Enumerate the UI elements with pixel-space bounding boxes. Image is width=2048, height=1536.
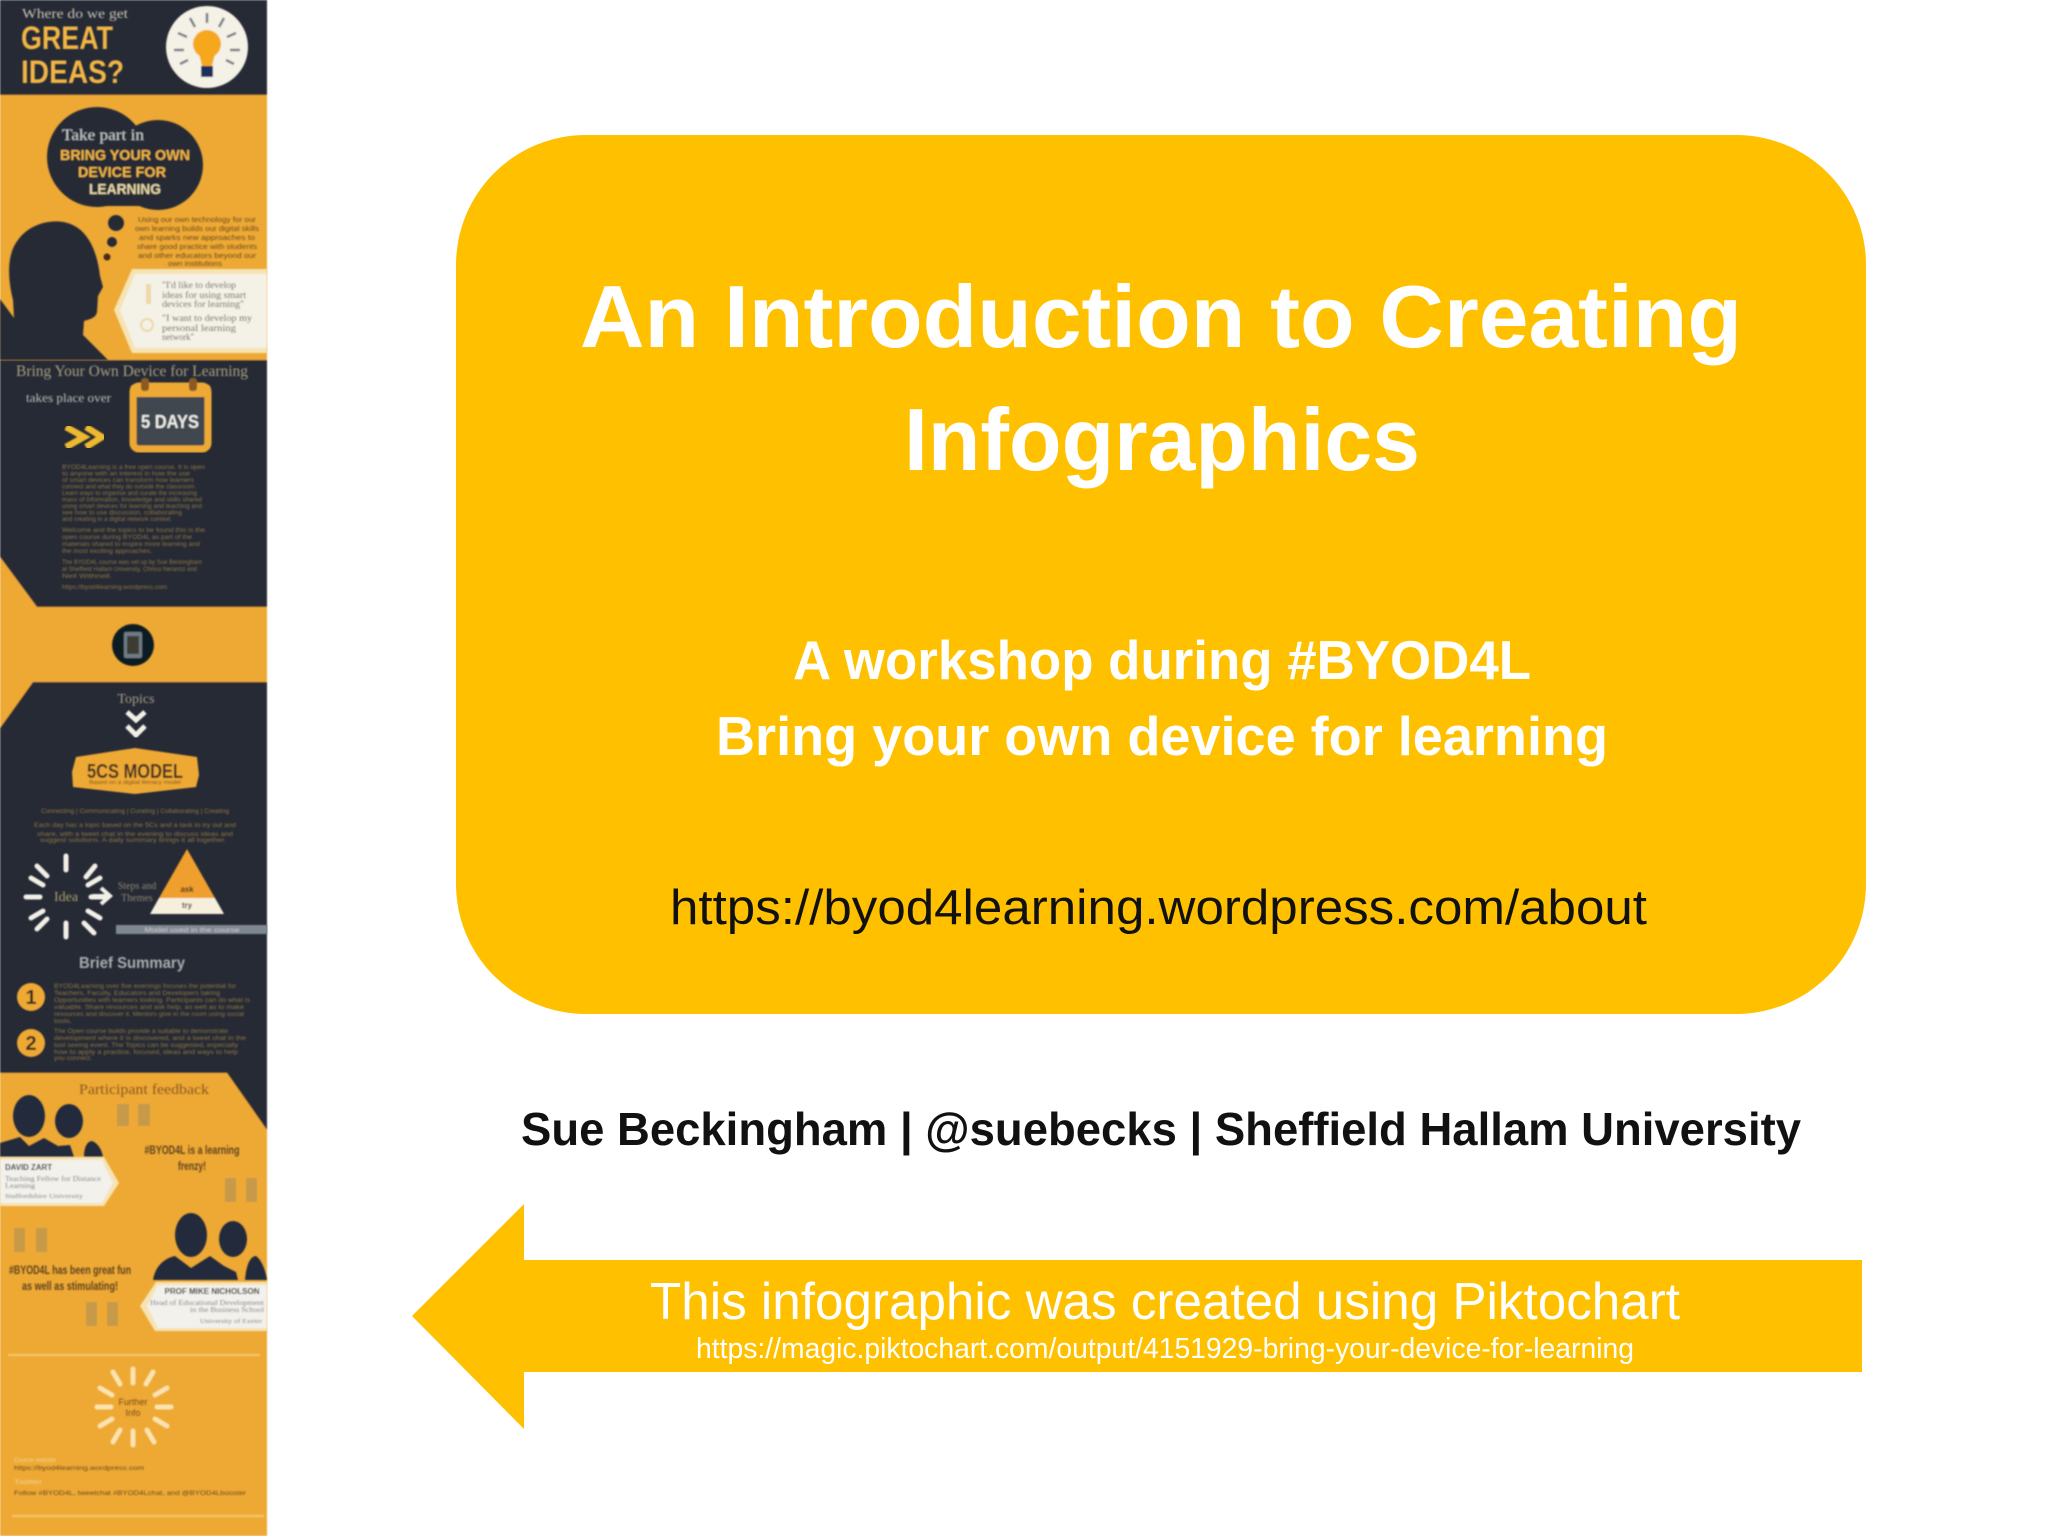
text: summary two: tool seeing event. The Topics can be suggested, especially <box>54 1042 239 1049</box>
text: description paragraphs: The BYOD4L course was set up by Sue Beckingham <box>62 560 202 566</box>
icon: number one: 1 <box>25 987 37 1009</box>
icon: number two <box>17 1029 45 1057</box>
text: further info links: Follow #BYOD4L, tweetchat #BYOD4Lchat, and @BYOD4Lbooster <box>14 1490 247 1497</box>
text: summary two: development where it is discovered, and a tweet chat in the <box>54 1035 246 1042</box>
text: further info links: Twitter <box>14 1479 43 1486</box>
text: summary one: Opportunities with learners looking. Participants can do what is <box>54 997 251 1004</box>
heading: bring your own device: Bring Your Own Device for Learning <box>16 363 248 380</box>
callout: quotes: ideas for using smart <box>162 290 246 301</box>
profile: david: DAVID ZART <box>5 1163 52 1172</box>
text: topics description: Each day has a topic based on the 5Cs and a task to try out and <box>34 822 236 829</box>
section: head silhouette <box>0 215 124 360</box>
profile: mike nicholson: Head of Educational Development <box>150 1299 264 1307</box>
callout: quotes: devices for learning" <box>162 299 244 310</box>
profile: mike nicholson: PROF MIKE NICHOLSON <box>164 1287 260 1296</box>
section: great ideas header: GREAT <box>21 20 113 56</box>
heading: participant feedback: Participant feedback <box>79 1082 210 1098</box>
text: summary one: BYOD4Learning over five evenings focuses the potential for <box>54 983 237 990</box>
text: description paragraphs: the most exciting approaches. <box>62 549 152 555</box>
subtitle: Bring your own device for learning <box>716 705 1608 767</box>
text: intro paragraph: Using our own technology for our <box>138 217 257 224</box>
profile: david: Learning <box>5 1182 36 1190</box>
callout: quotes <box>114 269 267 353</box>
text: intro paragraph: own learning builds our digital skills <box>135 226 260 233</box>
text: description paragraphs: to anyone with an interest in how the use <box>62 472 191 478</box>
heading: topics: Topics <box>117 692 155 707</box>
section: great ideas header: IDEAS? <box>21 54 124 90</box>
icon: number one <box>17 983 45 1011</box>
heading: topics <box>117 692 155 735</box>
text: topics description: suggest solutions. A daily summary brings it all together. <box>40 837 226 844</box>
quote: learning frenzy: #BYOD4L is a learning <box>144 1143 240 1157</box>
text: summary one: Teachers, Faculty, Educators and Developers taking <box>54 990 220 997</box>
subtitle <box>716 629 1608 767</box>
heading: bring your own device: takes place over <box>26 390 112 405</box>
callout: quotes: "I want to develop my <box>162 314 252 324</box>
text: topics description: Connecting | Communicating | Curating | Collaborating | Creating <box>41 808 229 815</box>
text: description paragraphs: Learn ways to organise and curate the increasing <box>62 491 197 497</box>
chart: triangle diagram <box>116 849 267 934</box>
section: thought cloud <box>47 107 203 210</box>
text: further info links: Course website <box>14 1457 56 1464</box>
callout: quotes: "I'd like to develop <box>162 281 236 291</box>
text: summary two: The Open course builds provide a suitable to demonstrate <box>54 1028 228 1035</box>
text: description paragraphs: at Sheffield Hallam University, Chrissi Nerantzi and <box>62 567 197 573</box>
link: about page: https://byod4learning.wordpress.com/about <box>670 881 1647 935</box>
quote: learning frenzy <box>144 1143 257 1202</box>
icon: idea burst: Themes <box>121 893 153 904</box>
section: thought cloud: LEARNING <box>89 182 161 198</box>
title: An Introduction to Creating <box>580 267 1742 366</box>
callout: quotes: personal learning <box>162 324 236 334</box>
text: description paragraphs: of smart devices can transform how learners <box>62 478 194 484</box>
heading: participant feedback <box>79 1082 210 1126</box>
text: intro paragraph: and sparks new approaches to <box>139 235 255 242</box>
chart: triangle diagram: Model used in the course <box>144 928 240 934</box>
text: description paragraphs: and creating in a digital network context. <box>62 517 172 523</box>
text: description paragraphs: Welcome and the topics to be found this is the <box>62 528 206 534</box>
text: intro paragraph: own institutions <box>168 261 223 268</box>
section: further info: Further <box>118 1397 148 1407</box>
text: description paragraphs: Neil Withnell. <box>62 574 112 580</box>
text: summary two: you connect. <box>54 1055 92 1062</box>
text: topics description <box>34 808 236 844</box>
badge: 5Cs model <box>72 748 199 794</box>
text: topics description: share, with a tweet chat in the evening to discuss ideas and <box>37 831 233 838</box>
quote: great fun <box>9 1228 131 1326</box>
quote: great fun: #BYOD4L has been great fun <box>9 1263 131 1277</box>
text: intro paragraph: and other educators beyond our <box>138 253 257 260</box>
text: description paragraphs: see how to use discussion, collaborating <box>62 510 182 516</box>
infographic thumbnail strip <box>0 0 267 1536</box>
section: thought cloud: DEVICE FOR <box>78 165 167 181</box>
text: further info links <box>14 1457 247 1497</box>
icon: tablet badge <box>112 624 154 666</box>
text: summary one <box>54 983 251 1025</box>
text: description paragraphs: connect and what they do outside the classroom. <box>62 484 196 490</box>
callout: quotes: network" <box>162 333 194 343</box>
profile: mike nicholson: University of Exeter <box>200 1318 262 1325</box>
badge: 5Cs model: Based on a digital literacy model <box>89 780 181 786</box>
text: summary two <box>54 1028 246 1062</box>
text: intro paragraph <box>135 217 260 268</box>
panel: workshop title card <box>456 135 1866 1014</box>
text: further info links: https://byod4learning.wordpress.com <box>14 1465 144 1472</box>
icon: number two: 2 <box>25 1033 37 1055</box>
icon: idea burst: Steps and <box>118 881 156 892</box>
text: summary two: how to apply a practice, focused, ideas and ways to help <box>54 1049 238 1056</box>
section: thought cloud: Take part in <box>62 127 144 144</box>
text: summary one: resources and discover it. Mentors give in the room using social <box>54 1011 245 1018</box>
link: Piktochart output: https://magic.piktochart.com/output/4151929-bring-your-device-for-learning <box>696 1333 1634 1365</box>
subtitle: A workshop during #BYOD4L <box>793 629 1531 691</box>
profile: david: Teaching Fellow for Distance <box>5 1175 101 1183</box>
profile: mike nicholson: in the Business School <box>190 1306 264 1314</box>
title: Infographics <box>904 390 1420 489</box>
section: thought cloud: BRING YOUR OWN <box>60 148 190 164</box>
section: further info <box>8 1355 264 1516</box>
arrow: points to infographic <box>412 1204 1862 1429</box>
profile: david: Staffordshire University <box>5 1193 83 1200</box>
quote: learning frenzy: frenzy! <box>178 1159 206 1173</box>
chart: triangle diagram: try <box>182 901 193 910</box>
chart: triangle diagram: ask <box>180 885 194 894</box>
text: description paragraphs: using smart devices for learning and teaching and <box>62 504 202 510</box>
icon: calendar 5 days <box>130 378 211 449</box>
text: summary one: valuable. Share resources and ask help, as well as to make <box>54 1004 244 1011</box>
text: description paragraphs: mass of information, knowledge and skills shared <box>62 498 202 504</box>
section: great ideas header: Where do we get <box>22 6 128 21</box>
icon: calendar 5 days: 5 DAYS <box>141 412 199 432</box>
icon: idea burst: Idea <box>54 890 79 905</box>
quote: great fun: as well as stimulating! <box>22 1279 118 1293</box>
text: description paragraphs <box>62 465 206 591</box>
heading: brief summary: Brief Summary <box>79 955 185 972</box>
text: description paragraphs: https://byod4learning.wordpress.com <box>62 585 167 591</box>
title <box>580 267 1742 489</box>
text: summary one: tools. <box>54 1018 72 1025</box>
icon: double chevrons <box>66 427 102 447</box>
heading: bring your own device <box>16 363 248 405</box>
profile: david <box>0 1095 119 1206</box>
text: description paragraphs: materials shared to inspire more learning and <box>62 542 200 548</box>
badge: 5Cs model: 5CS MODEL <box>87 761 183 783</box>
section: further info: Info <box>125 1408 141 1418</box>
text: description paragraphs: BYOD4Learning is a free open course. It is open <box>62 465 205 471</box>
text: description paragraphs: open course during BYOD4L as part of the <box>62 535 193 541</box>
text: intro paragraph: share good practice with students <box>137 244 258 251</box>
caption: Piktochart credit: This infographic was created using Piktochart <box>650 1273 1681 1331</box>
profile: mike nicholson <box>140 1213 267 1331</box>
icon: idea burst <box>26 856 156 937</box>
section: great ideas header <box>21 6 248 90</box>
author line: Sue Beckingham | @suebecks | Sheffield Hallam University <box>521 1103 1801 1155</box>
